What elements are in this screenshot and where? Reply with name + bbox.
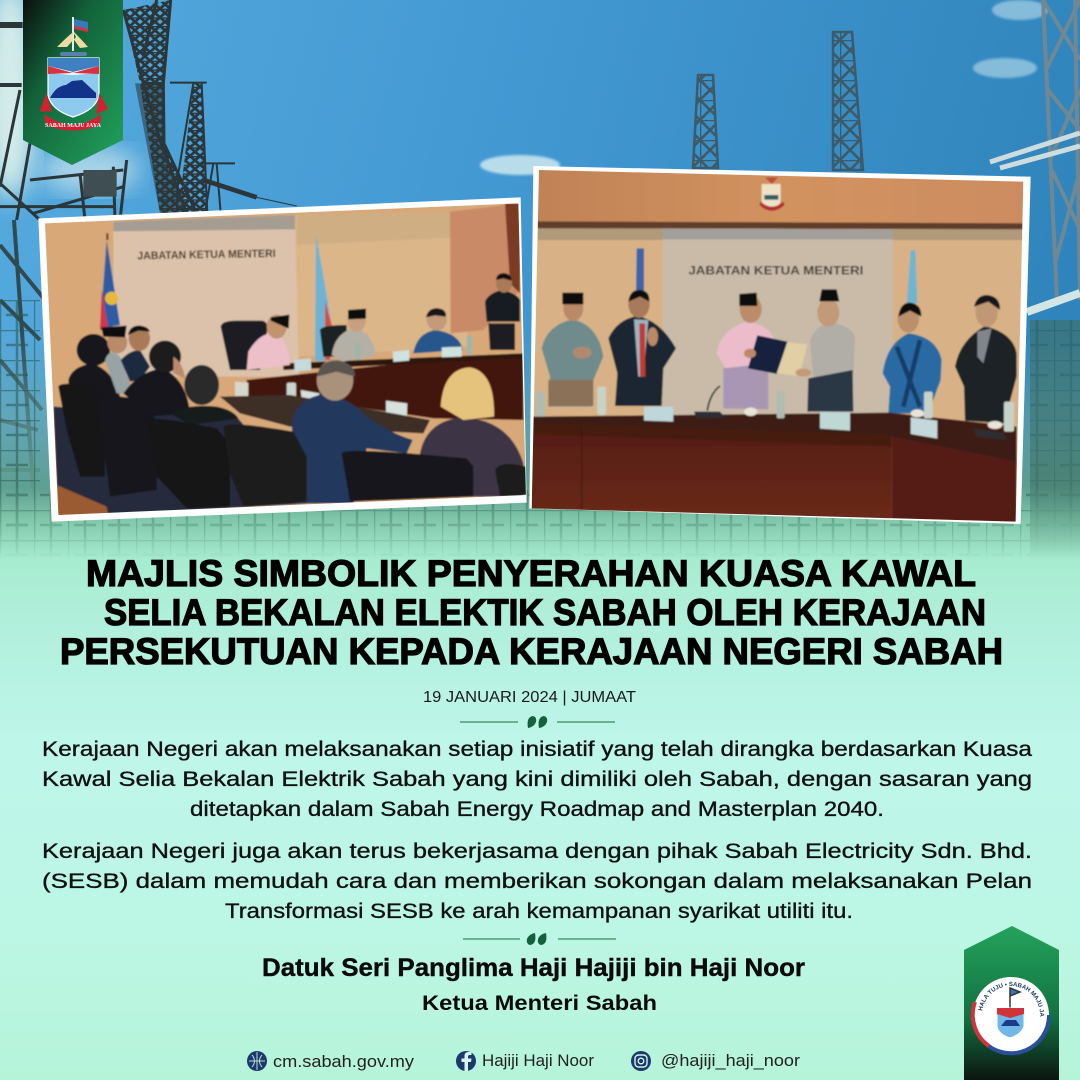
title line 1: MAJLIS SIMBOLIK PENYERAHAN KUASA KAWAL bbox=[86, 553, 976, 594]
icon: instagram bbox=[631, 1051, 651, 1071]
title line 2: SELIA BEKALAN ELEKTIK SABAH OLEH KERAJAAN bbox=[104, 592, 986, 633]
background: mint text area bbox=[0, 600, 1080, 1080]
photo: left meeting room bbox=[30, 190, 530, 530]
certificate folder bbox=[744, 335, 811, 377]
chairs: near row bbox=[58, 384, 527, 508]
icon: globe bbox=[247, 1051, 267, 1071]
desk items: bottles, mics and name cards bbox=[536, 386, 1014, 439]
signatory title: Ketua Menteri Sabah bbox=[422, 992, 657, 1015]
person 4: grey baju bbox=[807, 289, 855, 412]
substation structures fading into the mint area bbox=[0, 300, 1080, 560]
wood header band bbox=[537, 168, 1025, 224]
divider: closing quote bbox=[463, 933, 616, 945]
title line 3: PERSEKUTUAN KEPADA KERAJAAN NEGERI SABAH bbox=[60, 631, 1003, 672]
flag: Malaysia bbox=[100, 233, 120, 330]
quote paragraph 2 bbox=[42, 840, 1032, 923]
line: Kerajaan Negeri akan melaksanakan setiap inisiatif yang telah dirangka berdasarkan Kuasa bbox=[42, 738, 1032, 761]
desk bbox=[530, 413, 1017, 523]
crest: shield bbox=[48, 58, 99, 117]
table items: bottles and cards bbox=[235, 336, 472, 422]
person: grey baju centre bbox=[332, 309, 376, 362]
title bbox=[60, 553, 1003, 672]
wall panel centre bbox=[663, 228, 893, 420]
footer: instagram: @hajiji_haji_noor bbox=[661, 1052, 801, 1070]
wall panel with sign bbox=[113, 215, 299, 377]
logo: flag pole bbox=[1010, 988, 1020, 1008]
table: near surface bbox=[220, 395, 430, 433]
footer: website bbox=[247, 1051, 415, 1071]
line: Transformasi SESB ke arah kemampanan syarikat utiliti itu. bbox=[225, 900, 853, 923]
signatory name: Datuk Seri Panglima Haji Hajiji bin Haji Noor bbox=[262, 954, 805, 982]
person 6: black blazer bbox=[955, 295, 1017, 423]
person: navy suit back view bbox=[292, 359, 413, 503]
towers: distant middle bbox=[693, 32, 863, 170]
person 3: pink baju bbox=[717, 293, 774, 409]
background: mint fade bbox=[0, 330, 1080, 600]
person: batik right bbox=[413, 308, 463, 353]
line: Kawal Selia Bekalan Elektrik Sabah yang kini dimiliki oleh Sabah, dengan sasaran yang bbox=[42, 768, 1032, 791]
person: yellow headscarf back view bbox=[420, 367, 523, 497]
icon: facebook bbox=[456, 1051, 476, 1071]
chairs: far side bbox=[221, 321, 267, 370]
sign: Jabatan Ketua Menteri: JABATAN KETUA MENTERI bbox=[688, 263, 863, 277]
towers: left cluster bbox=[0, 0, 297, 220]
footer: facebook: Hajiji Haji Noor bbox=[482, 1052, 595, 1070]
sign: Jabatan Ketua Menteri: JABATAN KETUA MENTERI bbox=[137, 248, 276, 262]
table: far side bbox=[247, 357, 523, 420]
footer: website: cm.sabah.gov.my bbox=[273, 1053, 415, 1071]
divider: opening quote bbox=[460, 716, 615, 728]
flag: Malaysia behind left bbox=[636, 248, 644, 291]
line: ditetapkan dalam Sabah Energy Roadmap and Masterplan 2040. bbox=[190, 798, 884, 821]
flag: Sabah behind right bbox=[907, 250, 917, 303]
footer: instagram bbox=[631, 1051, 801, 1071]
banner: Sabah crest top-left bbox=[23, 0, 123, 165]
crest on wood band bbox=[759, 177, 785, 211]
person: pink baju centre bbox=[247, 315, 290, 370]
person 5: blue batik bbox=[883, 303, 942, 413]
person 2: dark suit bbox=[608, 290, 676, 406]
group: left row of attendees bbox=[68, 326, 238, 425]
floor behind chairs bbox=[53, 407, 310, 518]
logo: shield bbox=[997, 1008, 1024, 1038]
flag: Sabah bbox=[315, 233, 332, 362]
crest: motto ribbon bbox=[42, 98, 106, 130]
line: Kerajaan Negeri juga akan terus bekerjasama dengan pihak Sabah Electricity Sdn. Bhd. bbox=[42, 840, 1032, 863]
person 1: grey baju bbox=[542, 293, 603, 407]
towers: left edge below bbox=[0, 220, 45, 500]
quote paragraph 1 bbox=[42, 738, 1032, 821]
crest: flag and arms bbox=[57, 17, 88, 56]
date: 19 JANUARI 2024 | JUMAAT bbox=[423, 689, 637, 706]
person: standing aide bbox=[485, 273, 520, 322]
photo: right handover ceremony bbox=[520, 160, 1040, 530]
logo: ring text: HALA TUJU • SABAH MAJU JAYA bbox=[978, 982, 1044, 1017]
towers: right edge bbox=[990, 0, 1080, 312]
crest: motto ribbon: SABAH MAJU JAYA bbox=[45, 123, 102, 129]
line: (SESB) dalam memudah cara dan memberikan sokongan dalam melaksanakan Pelan bbox=[42, 870, 1032, 893]
